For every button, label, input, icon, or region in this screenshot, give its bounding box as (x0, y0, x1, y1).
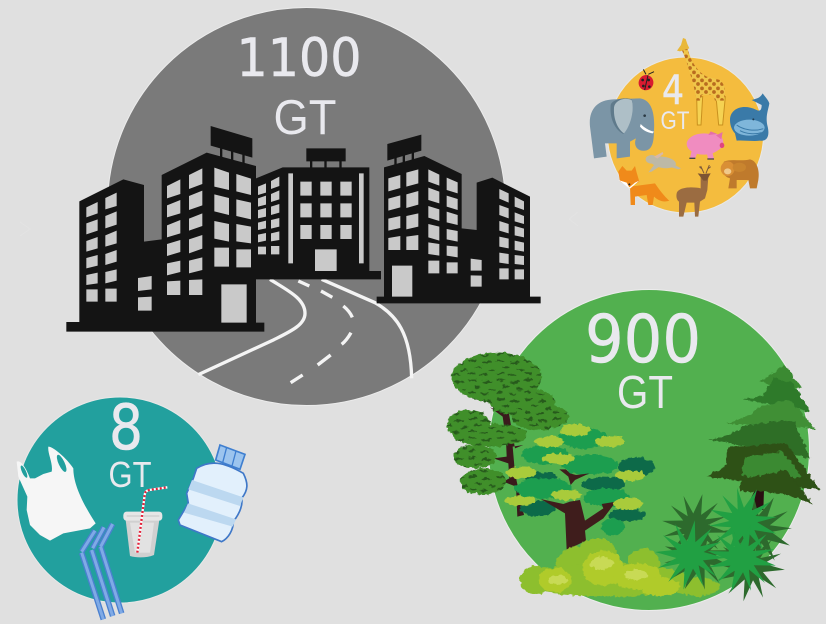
windows: centre building (258, 173, 364, 271)
value: 900: 900 (585, 301, 701, 378)
icon: drinking straws (82, 524, 122, 619)
icon: rabbit (646, 152, 681, 172)
icon: ladybug (636, 69, 656, 93)
icon: plastic bag (17, 447, 96, 541)
grey circle (108, 8, 506, 406)
green circle (488, 290, 810, 610)
icon: deer (676, 165, 711, 217)
yellow circle (608, 57, 764, 213)
road markings (198, 279, 412, 383)
icon: elephant (590, 98, 654, 158)
icon: fox (618, 166, 669, 205)
value: 1100: 1100 (236, 28, 362, 89)
bush (519, 538, 720, 597)
tree: conifer (707, 365, 819, 510)
icon: bear (721, 159, 759, 188)
panel: forest 900 GT (447, 290, 819, 610)
illustration: city buildings and road (66, 126, 541, 383)
panel: animals 4 GT (590, 38, 769, 217)
icon: whale (730, 93, 769, 141)
panel: buildings 1100 GT (66, 8, 541, 406)
unit: GT: GT (274, 91, 336, 145)
building: centre (256, 148, 381, 279)
value: 4: 4 (662, 68, 684, 114)
icon: pig (687, 131, 724, 159)
building: left (66, 126, 264, 332)
illustration: trees (447, 352, 819, 605)
windows: left building (86, 168, 251, 323)
unit: GT: GT (617, 366, 673, 418)
building: right (377, 135, 541, 303)
icon: giraffe (677, 38, 725, 125)
icon: plastic cup with straw (123, 487, 167, 557)
windows: right building (388, 169, 524, 297)
unit: GT: GT (660, 107, 690, 135)
value: 8: 8 (109, 391, 143, 464)
icon: water bottle (178, 445, 247, 542)
illustration: animals (590, 38, 769, 217)
unit: GT: GT (108, 454, 152, 495)
tree: dark broadleaf (447, 352, 568, 517)
panel: plastic 8 GT (17, 391, 247, 619)
teal circle (17, 397, 223, 603)
tree: bright broadleaf (505, 424, 655, 550)
ferns (652, 477, 805, 605)
illustration: plastic items (17, 445, 247, 619)
